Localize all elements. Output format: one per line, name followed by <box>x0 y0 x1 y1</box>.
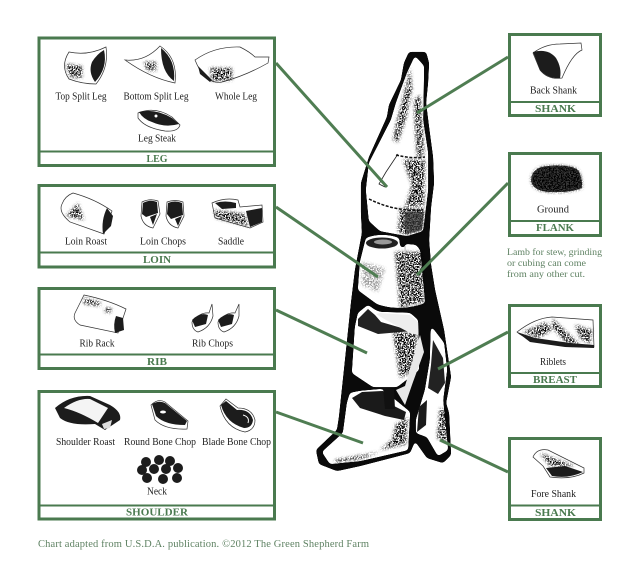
label: Bottom Split Leg <box>124 92 188 102</box>
icon: leg steak <box>138 110 180 131</box>
rib frame <box>39 288 274 368</box>
note about stew and grinding: from any other cut. <box>507 269 585 280</box>
label: Top Split Leg <box>56 92 106 102</box>
lamb carcass diagram <box>316 52 451 471</box>
loin section <box>358 235 425 308</box>
icon: riblets <box>517 317 594 348</box>
shoulder frame <box>39 392 274 519</box>
label: Blade Bone Chop <box>202 437 271 448</box>
icon: rib chops <box>192 304 239 332</box>
flank frame <box>510 154 600 236</box>
arrow: rib <box>276 310 367 353</box>
panel: loin <box>39 186 275 267</box>
label: Fore Shank <box>531 489 576 500</box>
arrow: shoulder <box>276 412 363 443</box>
label: Leg Steak <box>138 134 176 144</box>
label: Saddle <box>218 236 245 248</box>
icon: blade bone chop <box>220 399 255 432</box>
icon: shoulder roast <box>55 396 120 430</box>
icon: fore shank <box>533 450 584 478</box>
arrow: fore shank <box>440 440 508 472</box>
heading: LOIN <box>143 255 171 266</box>
icon: round bone chop <box>151 401 188 429</box>
icon: loin chops <box>141 200 184 228</box>
icon: saddle <box>212 199 263 228</box>
note about stew and grinding: or cubing can come <box>507 259 586 269</box>
label: Shoulder Roast <box>56 437 115 448</box>
arrow: breast <box>438 332 508 369</box>
icon: loin roast <box>61 193 113 234</box>
icon: bottom split leg <box>125 46 175 83</box>
label: Loin Roast <box>65 236 107 248</box>
icon: ground lamb <box>531 166 582 192</box>
icon: top split leg <box>64 47 107 84</box>
leg section <box>366 56 428 236</box>
panel: fore shank <box>509 438 601 520</box>
icon: back shank <box>533 43 582 78</box>
label: Ground <box>537 204 569 216</box>
breast and fore shank section <box>416 326 448 456</box>
arrow: loin <box>276 207 378 277</box>
fore shank frame <box>510 438 600 520</box>
loin frame <box>39 186 274 267</box>
heading: SHOULDER <box>126 508 188 518</box>
label: Loin Chops <box>140 236 186 248</box>
heading: SHANK <box>535 508 577 519</box>
panel: shoulder <box>39 392 275 519</box>
label: Riblets <box>540 357 566 368</box>
heading: LEG <box>146 154 168 165</box>
leg frame <box>39 38 274 166</box>
arrow: flank <box>417 183 508 275</box>
heading: FLANK <box>536 223 575 234</box>
label: Round Bone Chop <box>124 437 196 448</box>
shoulder section <box>322 388 410 464</box>
rib section <box>352 305 424 405</box>
note about stew and grinding <box>507 247 602 280</box>
icon: rib rack <box>74 295 126 333</box>
label: Whole Leg <box>215 92 257 102</box>
heading: BREAST <box>533 375 577 386</box>
icon: neck pieces <box>137 455 183 484</box>
panel: back shank <box>509 34 601 116</box>
arrow: leg <box>276 63 387 187</box>
panel: rib <box>39 288 275 368</box>
heading: RIB <box>147 357 167 368</box>
panel: breast <box>509 306 601 386</box>
note about stew and grinding: Lamb for stew, grinding <box>507 247 602 258</box>
breast frame <box>510 306 600 386</box>
label: Back Shank <box>530 86 577 96</box>
panel: flank <box>509 154 601 236</box>
label: Rib Rack <box>80 338 114 350</box>
footer credit: Chart adapted from U.S.D.A. publication. ©2012 The Green Shepherd Farm <box>38 539 369 550</box>
heading: SHANK <box>535 104 577 115</box>
connector lines <box>276 57 508 472</box>
icon: whole leg <box>195 47 269 82</box>
carcass black silhouette <box>316 52 451 471</box>
label: Neck <box>147 486 167 498</box>
label: Rib Chops <box>192 338 233 350</box>
panel: leg <box>39 38 275 166</box>
back shank frame <box>510 34 600 116</box>
arrow: back shank <box>417 57 508 113</box>
